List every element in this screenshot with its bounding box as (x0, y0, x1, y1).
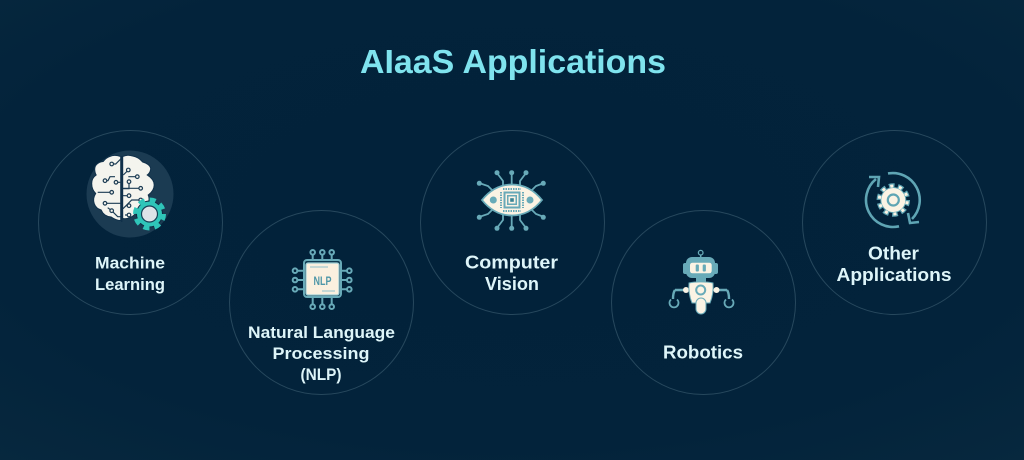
icon: brain with gear (86, 150, 174, 238)
icon: rotating gear (866, 173, 920, 227)
label: natural language processing (248, 323, 395, 384)
panel: other applications (802, 130, 986, 314)
label: other applications: Other (868, 244, 919, 264)
label: natural language processing: Processing (272, 344, 370, 363)
label: natural language processing: (NLP) (300, 365, 342, 384)
icon: NLP chip (293, 250, 352, 309)
panel: computer vision (420, 130, 604, 314)
label: other applications (836, 244, 952, 285)
icon: robot (669, 250, 734, 314)
panel: natural language processing (230, 210, 414, 394)
title: AIaaS Applications (360, 43, 666, 80)
label: machine learning: Learning (95, 275, 165, 294)
label: machine learning (95, 254, 165, 294)
panel: machine learning (38, 130, 222, 314)
label: computer vision: Vision (485, 274, 539, 294)
label: machine learning: Machine (95, 254, 165, 272)
label: natural language processing: Natural Language (248, 323, 395, 342)
icon: circuit eye (477, 170, 546, 231)
panel: robotics (612, 210, 796, 394)
label: other applications: Applications (836, 265, 952, 285)
label: robotics: Robotics (663, 342, 743, 362)
icon: NLP chip: NLP (314, 274, 332, 288)
label: computer vision (465, 252, 558, 294)
label: computer vision: Computer (465, 252, 558, 272)
